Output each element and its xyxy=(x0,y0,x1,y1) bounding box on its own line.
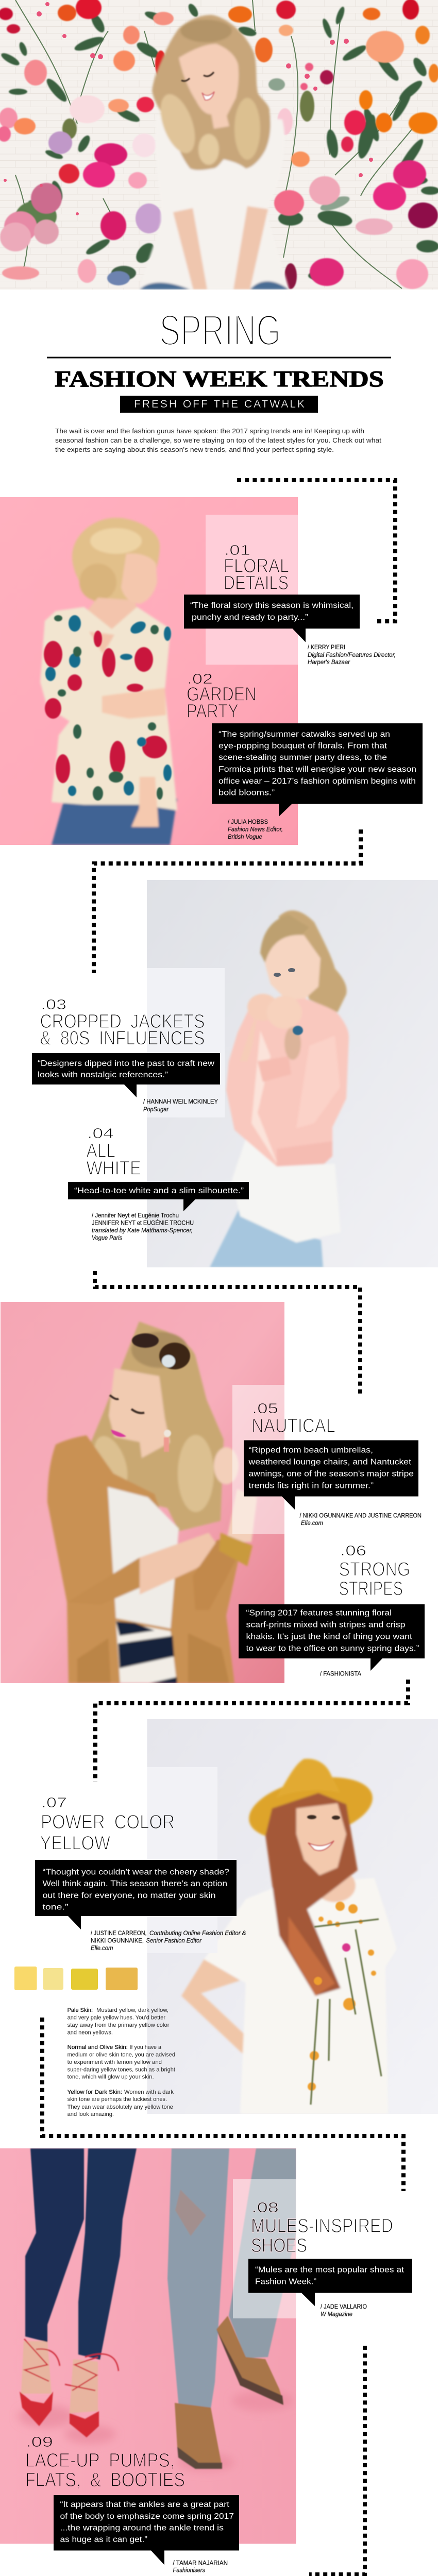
title: SPRING: SPRING xyxy=(159,306,281,354)
callout: lace-up quote: “It appears that the ankles are a great part xyxy=(60,2500,230,2509)
section 03 heading: CROPPED JACKETS xyxy=(40,1011,205,1032)
panel: floral and garden party xyxy=(0,497,423,845)
callout: strong stripes quote: to wear to the office on sunny spring days.” xyxy=(246,1645,419,1653)
divider rule top xyxy=(47,357,391,359)
attribution: Tamar Najarian: Fashionisers xyxy=(173,2568,205,2574)
attribution: Tamar Najarian: / TAMAR NAJARIAN xyxy=(173,2561,228,2567)
section 01 heading: DETAILS xyxy=(224,572,289,594)
callout: cropped jackets quote xyxy=(32,1053,220,1097)
attribution: Julia Hobbs: Fashion News Editor, xyxy=(228,826,283,833)
callout: nautical quote: trends fits right in for summer.” xyxy=(248,1481,374,1490)
skin tone advice text: medium or olive skin tone, you are advised xyxy=(68,2052,175,2058)
section 04 heading: .04 xyxy=(87,1125,114,1141)
callout: mules quote: “Mules are the most popular shoes at xyxy=(255,2266,405,2275)
skin tone advice text: Yellow for Dark Skin: xyxy=(68,2089,122,2095)
callout: mules quote xyxy=(248,2259,412,2306)
attribution: Hannah Weil McKinley: / HANNAH WEIL MCKINLEY xyxy=(143,1099,218,1105)
callout: cropped jackets quote: “Designers dipped into the past to craft new xyxy=(38,1059,214,1068)
section 09 heading: LACE-UP PUMPS, xyxy=(25,2450,175,2471)
attribution: Justine Carreon and Nikki Ogunnaike: Elle.com xyxy=(91,1945,113,1952)
dotted connector 4 xyxy=(95,1680,408,1782)
attribution: Julia Hobbs xyxy=(228,819,283,840)
callout: power color quote: out there for everyone, no matter your skin xyxy=(42,1891,215,1900)
attribution: Jade Vallario: W Magazine xyxy=(321,2311,352,2317)
callout: power color quote xyxy=(35,1860,237,1929)
skin tone advice text: skin tone are perhaps the luckiest ones. xyxy=(68,2096,167,2103)
skin tone advice text: super-daring yellow tones, such as a bright xyxy=(68,2066,175,2073)
attribution: Fashionista: / FASHIONISTA xyxy=(320,1671,361,1677)
callout: garden party quote xyxy=(212,723,423,817)
callout: floral quote: “The floral story this season is whimsical, xyxy=(190,601,353,610)
dotted connector 6 xyxy=(309,2346,365,2574)
heading: Fashion Week Trends: FASHION WEEK TRENDS xyxy=(55,366,384,392)
light overlay box xyxy=(147,968,225,1117)
skin tone advice text: Women with a dark xyxy=(124,2089,174,2095)
section 03 heading xyxy=(40,996,205,1049)
skin tone advice text xyxy=(68,2007,175,2117)
section 08 heading xyxy=(251,2199,393,2257)
skin tone advice text: and very pale yellow hues. You’d better xyxy=(68,2014,165,2021)
photo: woman in yellow hat xyxy=(147,1719,438,2114)
dotted connector 5 xyxy=(42,2018,403,2191)
section 02 heading: PARTY xyxy=(187,701,239,722)
dotted connector 3 xyxy=(95,1271,360,1397)
attribution: Julia Hobbs: / JULIA HOBBS xyxy=(228,819,268,825)
section 01 heading xyxy=(224,542,289,594)
section 02 heading: GARDEN xyxy=(187,684,257,705)
photo: legs and shoes on pink xyxy=(0,2148,296,2544)
attribution: Jennifer Neyt and Eugenie Trochu: / Jennifer Neyt et Eugénie Trochu xyxy=(92,1213,179,1219)
attribution: Justine Carreon and Nikki Ogunnaike: NIKKI OGUNNAIKE, xyxy=(91,1938,144,1944)
attribution: Justine Carreon and Nikki Ogunnaike: / JUSTINE CARREON, xyxy=(91,1930,146,1937)
section 09 heading xyxy=(25,2434,185,2491)
section 01 heading: .01 xyxy=(224,542,250,558)
section 01 heading: FLORAL xyxy=(224,555,289,577)
light overlay box xyxy=(147,1767,217,1953)
callout: mules quote: Fashion Week.” xyxy=(255,2277,316,2286)
panel: nautical and strong stripes xyxy=(1,1302,425,1683)
attribution: Hannah Weil McKinley xyxy=(143,1099,218,1113)
section 04 heading xyxy=(87,1125,141,1179)
callout: lace-up quote xyxy=(54,2495,239,2565)
dotted connector 1 xyxy=(237,480,395,621)
section 07 heading xyxy=(40,1794,175,1854)
section 06 heading: STRONG xyxy=(339,1559,410,1581)
hero photo: woman against floral wall xyxy=(0,0,438,290)
section 05 heading: NAUTICAL xyxy=(251,1415,335,1437)
section 09 heading: FLATS, & BOOTIES xyxy=(25,2469,185,2491)
callout: lace-up quote: ...the wrapping around the ankle trend is xyxy=(60,2523,224,2533)
skin tone advice text: If you have a xyxy=(130,2044,162,2050)
attribution: Jade Vallario: / JADE VALLARIO xyxy=(321,2304,367,2310)
intro paragraph: the experts are saying about this season's new trends, and find your perfect spring style. xyxy=(55,446,334,453)
photo: woman in pink bomber jacket xyxy=(147,880,438,1267)
attribution: Kerry Pieri: / KERRY PIERI xyxy=(308,645,345,651)
callout: floral quote: punchy and ready to party...” xyxy=(192,613,308,622)
intro paragraph xyxy=(55,427,381,453)
callout: strong stripes quote xyxy=(239,1604,425,1671)
skin tone advice text: stay away from the primary yellow color xyxy=(68,2022,170,2028)
callout: nautical quote: awnings, one of the season's major stripe xyxy=(248,1469,414,1478)
section 03 heading: .03 xyxy=(41,996,66,1012)
skin tone advice text: to experiment with lemon yellow and xyxy=(68,2059,162,2065)
callout: nautical quote: “Ripped from beach umbrellas, xyxy=(248,1446,373,1454)
attribution: Julia Hobbs: British Vogue xyxy=(228,834,262,840)
dotted connector 2 xyxy=(94,829,361,973)
attribution: Jennifer Neyt and Eugenie Trochu: Vogue Paris xyxy=(92,1235,122,1242)
callout: floral quote xyxy=(184,595,360,642)
section 06 heading xyxy=(339,1543,410,1600)
light overlay box xyxy=(232,1385,284,1534)
skin tone advice text: They can wear absolutely any yellow tone xyxy=(68,2104,173,2110)
callout: power color quote: Well think again. This season there’s an option xyxy=(42,1879,227,1888)
section 02 heading xyxy=(187,671,257,722)
section 02 heading: .02 xyxy=(187,671,213,687)
section 05 heading xyxy=(251,1400,335,1437)
section 04 heading: WHITE xyxy=(87,1158,141,1179)
skin tone advice text: Normal and Olive Skin: xyxy=(68,2044,128,2050)
section 07 heading: .07 xyxy=(41,1794,67,1810)
attribution: Tamar Najarian xyxy=(173,2561,228,2574)
section 07 heading: YELLOW xyxy=(40,1833,110,1854)
callout: lace-up quote: of the body to emphasize come spring 2017 xyxy=(60,2512,234,2521)
translucent overlay box xyxy=(233,2179,296,2318)
panel: power color yellow xyxy=(14,1719,438,2117)
callout: nautical quote xyxy=(244,1440,418,1510)
section 08 heading: MULES-INSPIRED xyxy=(251,2215,393,2237)
attribution: Jade Vallario xyxy=(321,2304,367,2317)
callout: cropped jackets quote: looks with nostalgic references.” xyxy=(38,1071,168,1079)
section 04 heading: ALL xyxy=(87,1140,115,1162)
section 05 heading: .05 xyxy=(252,1400,278,1416)
callout: strong stripes quote: khakis. It's just the kind of thing you want xyxy=(246,1633,413,1641)
attribution: Jennifer Neyt and Eugenie Trochu xyxy=(92,1213,194,1242)
panel: mules and lace-up shoes xyxy=(0,2148,412,2574)
callout: all white quote xyxy=(68,1182,249,1211)
callout: nautical quote: weathered lounge chairs, and Nantucket xyxy=(248,1458,412,1466)
intro paragraph: The wait is over and the fashion gurus have spoken: the 2017 spring trends are in! Keeping up with xyxy=(55,427,364,435)
attribution: Kerry Pieri: Digital Fashion/Features Director, xyxy=(308,652,396,658)
callout: strong stripes quote: scarf-prints mixed with stripes and crisp xyxy=(246,1621,406,1630)
banner: fresh off the catwalk xyxy=(120,396,318,413)
attribution: Justine Carreon and Nikki Ogunnaike: Senior Fashion Editor xyxy=(146,1938,202,1944)
callout: garden party quote: Formica prints that will energise your new season xyxy=(218,765,416,774)
callout: garden party quote: bold blooms.” xyxy=(218,788,275,798)
skin tone advice text: Pale Skin: xyxy=(68,2007,93,2013)
attribution: Kerry Pieri: Harper's Bazaar xyxy=(308,659,350,666)
callout: lace-up quote: as huge as it can get.” xyxy=(60,2535,147,2544)
callout: garden party quote: scene-stealing summer party dress, to the xyxy=(218,753,387,762)
photo: woman in tan cardigan xyxy=(1,1302,284,1683)
colour swatches xyxy=(14,1967,138,1990)
section 07 heading: POWER COLOR xyxy=(41,1811,175,1833)
attribution: Hannah Weil McKinley: PopSugar xyxy=(143,1107,169,1113)
attribution: Justine Carreon and Nikki Ogunnaike: Contributing Online Fashion Editor & xyxy=(149,1930,246,1937)
light overlay box xyxy=(206,515,298,665)
callout: garden party quote: office wear – 2017’s fashion optimism begins with xyxy=(218,777,416,786)
skin tone advice text: Mustard yellow, dark yellow, xyxy=(96,2007,169,2013)
intro paragraph: seasonal fashion can be a challenge, so we're staying on top of the latest styles for you. Check out what xyxy=(55,436,381,444)
photo: woman in floral blouse xyxy=(0,497,298,845)
attribution: Jennifer Neyt and Eugenie Trochu: translated by Kate Matthams-Spencer, xyxy=(92,1228,193,1234)
skin tone advice text: and look amazing. xyxy=(68,2111,114,2117)
section 09 heading: .09 xyxy=(26,2434,53,2450)
section 08 heading: .08 xyxy=(251,2199,279,2215)
callout: garden party quote: “The spring/summer catwalks served up an xyxy=(218,730,390,739)
skin tone advice text: and neon yellows. xyxy=(68,2030,113,2036)
attribution: Nikki Ogunnaike and Justine Carreon xyxy=(300,1513,422,1527)
section 08 heading: SHOES xyxy=(251,2235,307,2257)
panel: cropped jackets and all white xyxy=(32,880,438,1267)
banner: fresh off the catwalk: FRESH OFF THE CATWALK xyxy=(134,398,305,410)
attribution: Nikki Ogunnaike and Justine Carreon: / NIKKI OGUNNAIKE AND JUSTINE CARREON xyxy=(300,1513,422,1519)
attribution: Justine Carreon and Nikki Ogunnaike xyxy=(91,1930,246,1952)
section 06 heading: .06 xyxy=(340,1543,366,1558)
callout: all white quote: “Head-to-toe white and a slim silhouette.” xyxy=(74,1187,244,1195)
attribution: Nikki Ogunnaike and Justine Carreon: Elle.com xyxy=(301,1520,323,1527)
callout: garden party quote: eye-popping bouquet of florals. From that xyxy=(218,742,388,750)
attribution: Jennifer Neyt and Eugenie Trochu: JENNIFER NEYT et EUGÉNIE TROCHU xyxy=(92,1220,194,1226)
skin tone advice text: tone, which will glow up your skin. xyxy=(68,2074,154,2080)
section 03 heading: & 80S INFLUENCES xyxy=(40,1027,205,1049)
section 06 heading: STRIPES xyxy=(339,1578,403,1600)
attribution: Kerry Pieri xyxy=(308,645,396,666)
callout: power color quote: “Thought you couldn’t wear the cheery shade? xyxy=(42,1868,229,1876)
callout: power color quote: tone.” xyxy=(42,1903,68,1912)
callout: strong stripes quote: “Spring 2017 features stunning floral xyxy=(246,1609,392,1618)
